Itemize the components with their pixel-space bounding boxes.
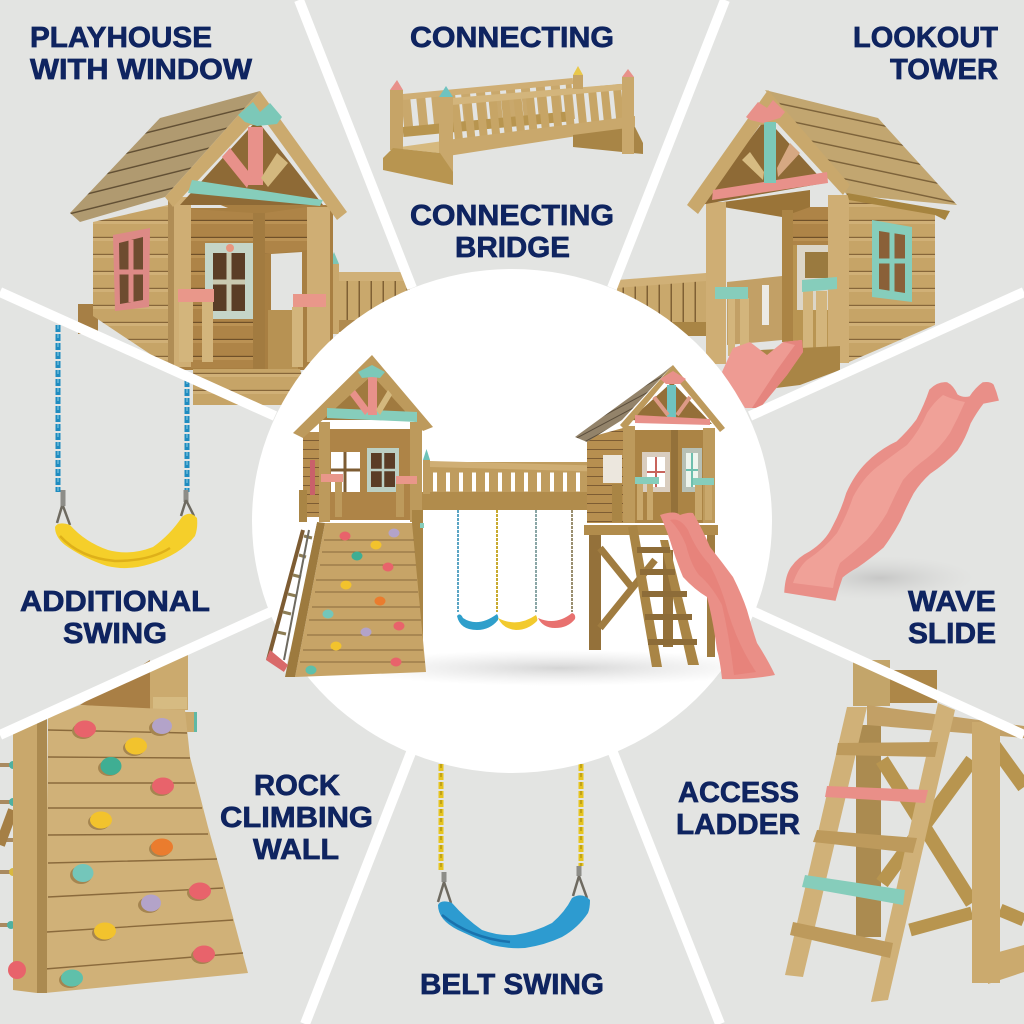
panel: additional swing <box>20 325 210 650</box>
ground shadow <box>345 650 775 686</box>
heading: lookout tower: TOWER <box>890 54 998 86</box>
small holds <box>306 528 404 674</box>
climbing holds <box>8 718 215 988</box>
three swings <box>457 510 575 630</box>
panel: belt swing <box>420 755 604 1001</box>
window: pink frame <box>113 228 150 311</box>
heading: playhouse with window: PLAYHOUSE <box>30 22 212 54</box>
heading: rock climbing wall: CLIMBING <box>220 802 373 834</box>
panel: rock climbing wall <box>0 652 373 993</box>
heading: wave slide: WAVE <box>908 586 996 618</box>
heading: connecting: CONNECTING <box>410 22 614 54</box>
left playhouse <box>293 355 433 522</box>
heading: rock climbing wall: WALL <box>253 834 339 866</box>
playhouse illustration <box>70 91 410 405</box>
right tower <box>575 365 725 657</box>
heading: connecting bridge: CONNECTING <box>410 200 614 232</box>
bridge illustration <box>383 66 643 185</box>
window: teal frame <box>205 243 254 319</box>
heading: additional swing <box>20 586 210 650</box>
blue swing illustration <box>438 755 590 948</box>
panel: lookout tower <box>617 22 998 408</box>
ladder <box>628 525 699 667</box>
heading: additional swing: SWING <box>63 618 167 650</box>
heading: playhouse with window: WITH WINDOW <box>30 54 253 86</box>
climbing wall <box>266 510 426 677</box>
heading: wave slide <box>908 586 996 650</box>
climbing wall illustration <box>0 652 248 993</box>
center: full play set <box>266 355 775 686</box>
heading: wave slide: SLIDE <box>908 618 996 650</box>
yellow swing illustration <box>55 325 197 568</box>
heading: rock climbing wall <box>220 770 373 866</box>
heading: additional swing: ADDITIONAL <box>20 586 210 618</box>
slide top <box>722 340 803 408</box>
central white circle <box>252 269 772 773</box>
main slide <box>660 512 775 679</box>
heading: access ladder: ACCESS <box>678 777 799 809</box>
heading: lookout tower <box>853 22 998 86</box>
heading: connecting bridge: BRIDGE <box>455 232 570 264</box>
heading: connecting bridge <box>410 200 614 264</box>
heading: belt swing: BELT SWING <box>420 969 604 1001</box>
panel: connecting bridge <box>383 22 643 264</box>
window: teal frame <box>872 220 912 302</box>
panel: access ladder <box>676 660 1024 1002</box>
heading: access ladder <box>676 777 800 841</box>
heading: lookout tower: LOOKOUT <box>853 22 998 54</box>
panel: playhouse with window <box>30 22 410 405</box>
heading: playhouse with window <box>30 22 253 86</box>
panel: wave slide <box>785 383 998 650</box>
heading: rock climbing wall: ROCK <box>254 770 340 802</box>
ladder illustration <box>785 660 1024 1002</box>
tower illustration <box>617 90 957 408</box>
heading: access ladder: LADDER <box>676 809 800 841</box>
wave slide illustration <box>785 383 998 600</box>
bridge <box>422 449 613 510</box>
